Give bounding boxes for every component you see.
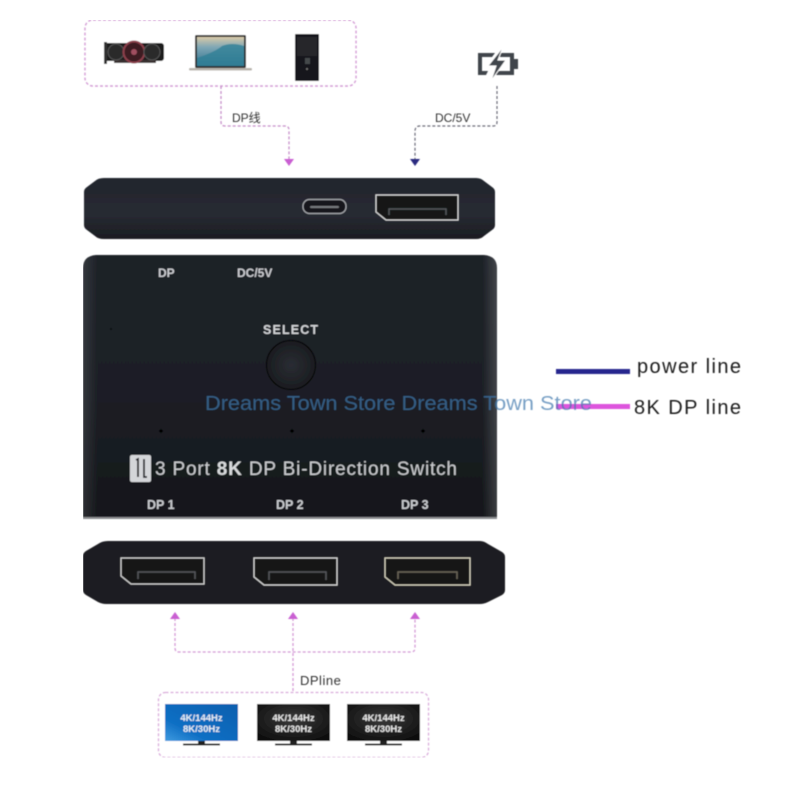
device: main front face <box>83 255 497 519</box>
arrow: DP cable from sources <box>221 86 294 166</box>
legend <box>556 356 741 419</box>
DisplayPort 2 <box>254 558 337 585</box>
USB-C port <box>303 200 346 214</box>
infographic <box>83 20 741 758</box>
DisplayPort 1 <box>121 558 204 584</box>
indicator lights <box>110 328 425 433</box>
arrow: power cable <box>410 86 497 166</box>
label: SELECT: SELECT <box>263 323 318 337</box>
DisplayPort 3 <box>385 558 470 585</box>
label: DPline: DPline <box>300 673 341 688</box>
button: select <box>266 340 316 390</box>
icon: PC tower <box>295 34 319 81</box>
icon: graphics card <box>104 42 164 64</box>
legend: power line <box>556 356 741 378</box>
monitor 2: 4K/144Hz <box>272 713 315 724</box>
monitor 1: 8K/30Hz <box>183 724 220 735</box>
label: DP 2: DP 2 <box>276 498 304 512</box>
label: DP cable: DP线 <box>232 111 261 125</box>
monitor 2: 8K/30Hz <box>275 724 312 735</box>
monitor 3 <box>347 704 420 746</box>
legend: 8K DP line: 8K DP line <box>634 397 741 419</box>
label: DP 3: DP 3 <box>401 498 429 512</box>
monitor 1 <box>165 704 238 746</box>
icon: battery charging <box>478 47 518 81</box>
watermark: Dreams Town Store Dreams Town Store <box>205 393 592 415</box>
monitor 2 <box>257 704 330 746</box>
label: DC/5V port: DC/5V <box>237 266 272 280</box>
legend: 8K DP line <box>556 397 741 419</box>
monitor 1: 4K/144Hz <box>180 713 223 724</box>
monitor 3: 4K/144Hz <box>362 713 405 724</box>
device: top side view <box>84 178 495 239</box>
panel: displays <box>158 692 428 758</box>
label: DP 1: DP 1 <box>147 498 175 512</box>
icon: laptop <box>189 35 252 70</box>
device: bottom side view <box>83 541 505 604</box>
DisplayPort port <box>376 195 458 220</box>
logo <box>130 455 151 482</box>
arrows: DP cables to displays <box>170 612 420 692</box>
product name: 3 Port 8K DP Bi-Direction Switch <box>155 459 457 480</box>
monitor 3: 8K/30Hz <box>365 724 402 735</box>
panel: source devices <box>85 20 356 86</box>
label: DC/5V cable: DC/5V <box>435 111 470 125</box>
label: DP port: DP <box>158 266 175 280</box>
legend: power line: power line <box>637 356 741 378</box>
